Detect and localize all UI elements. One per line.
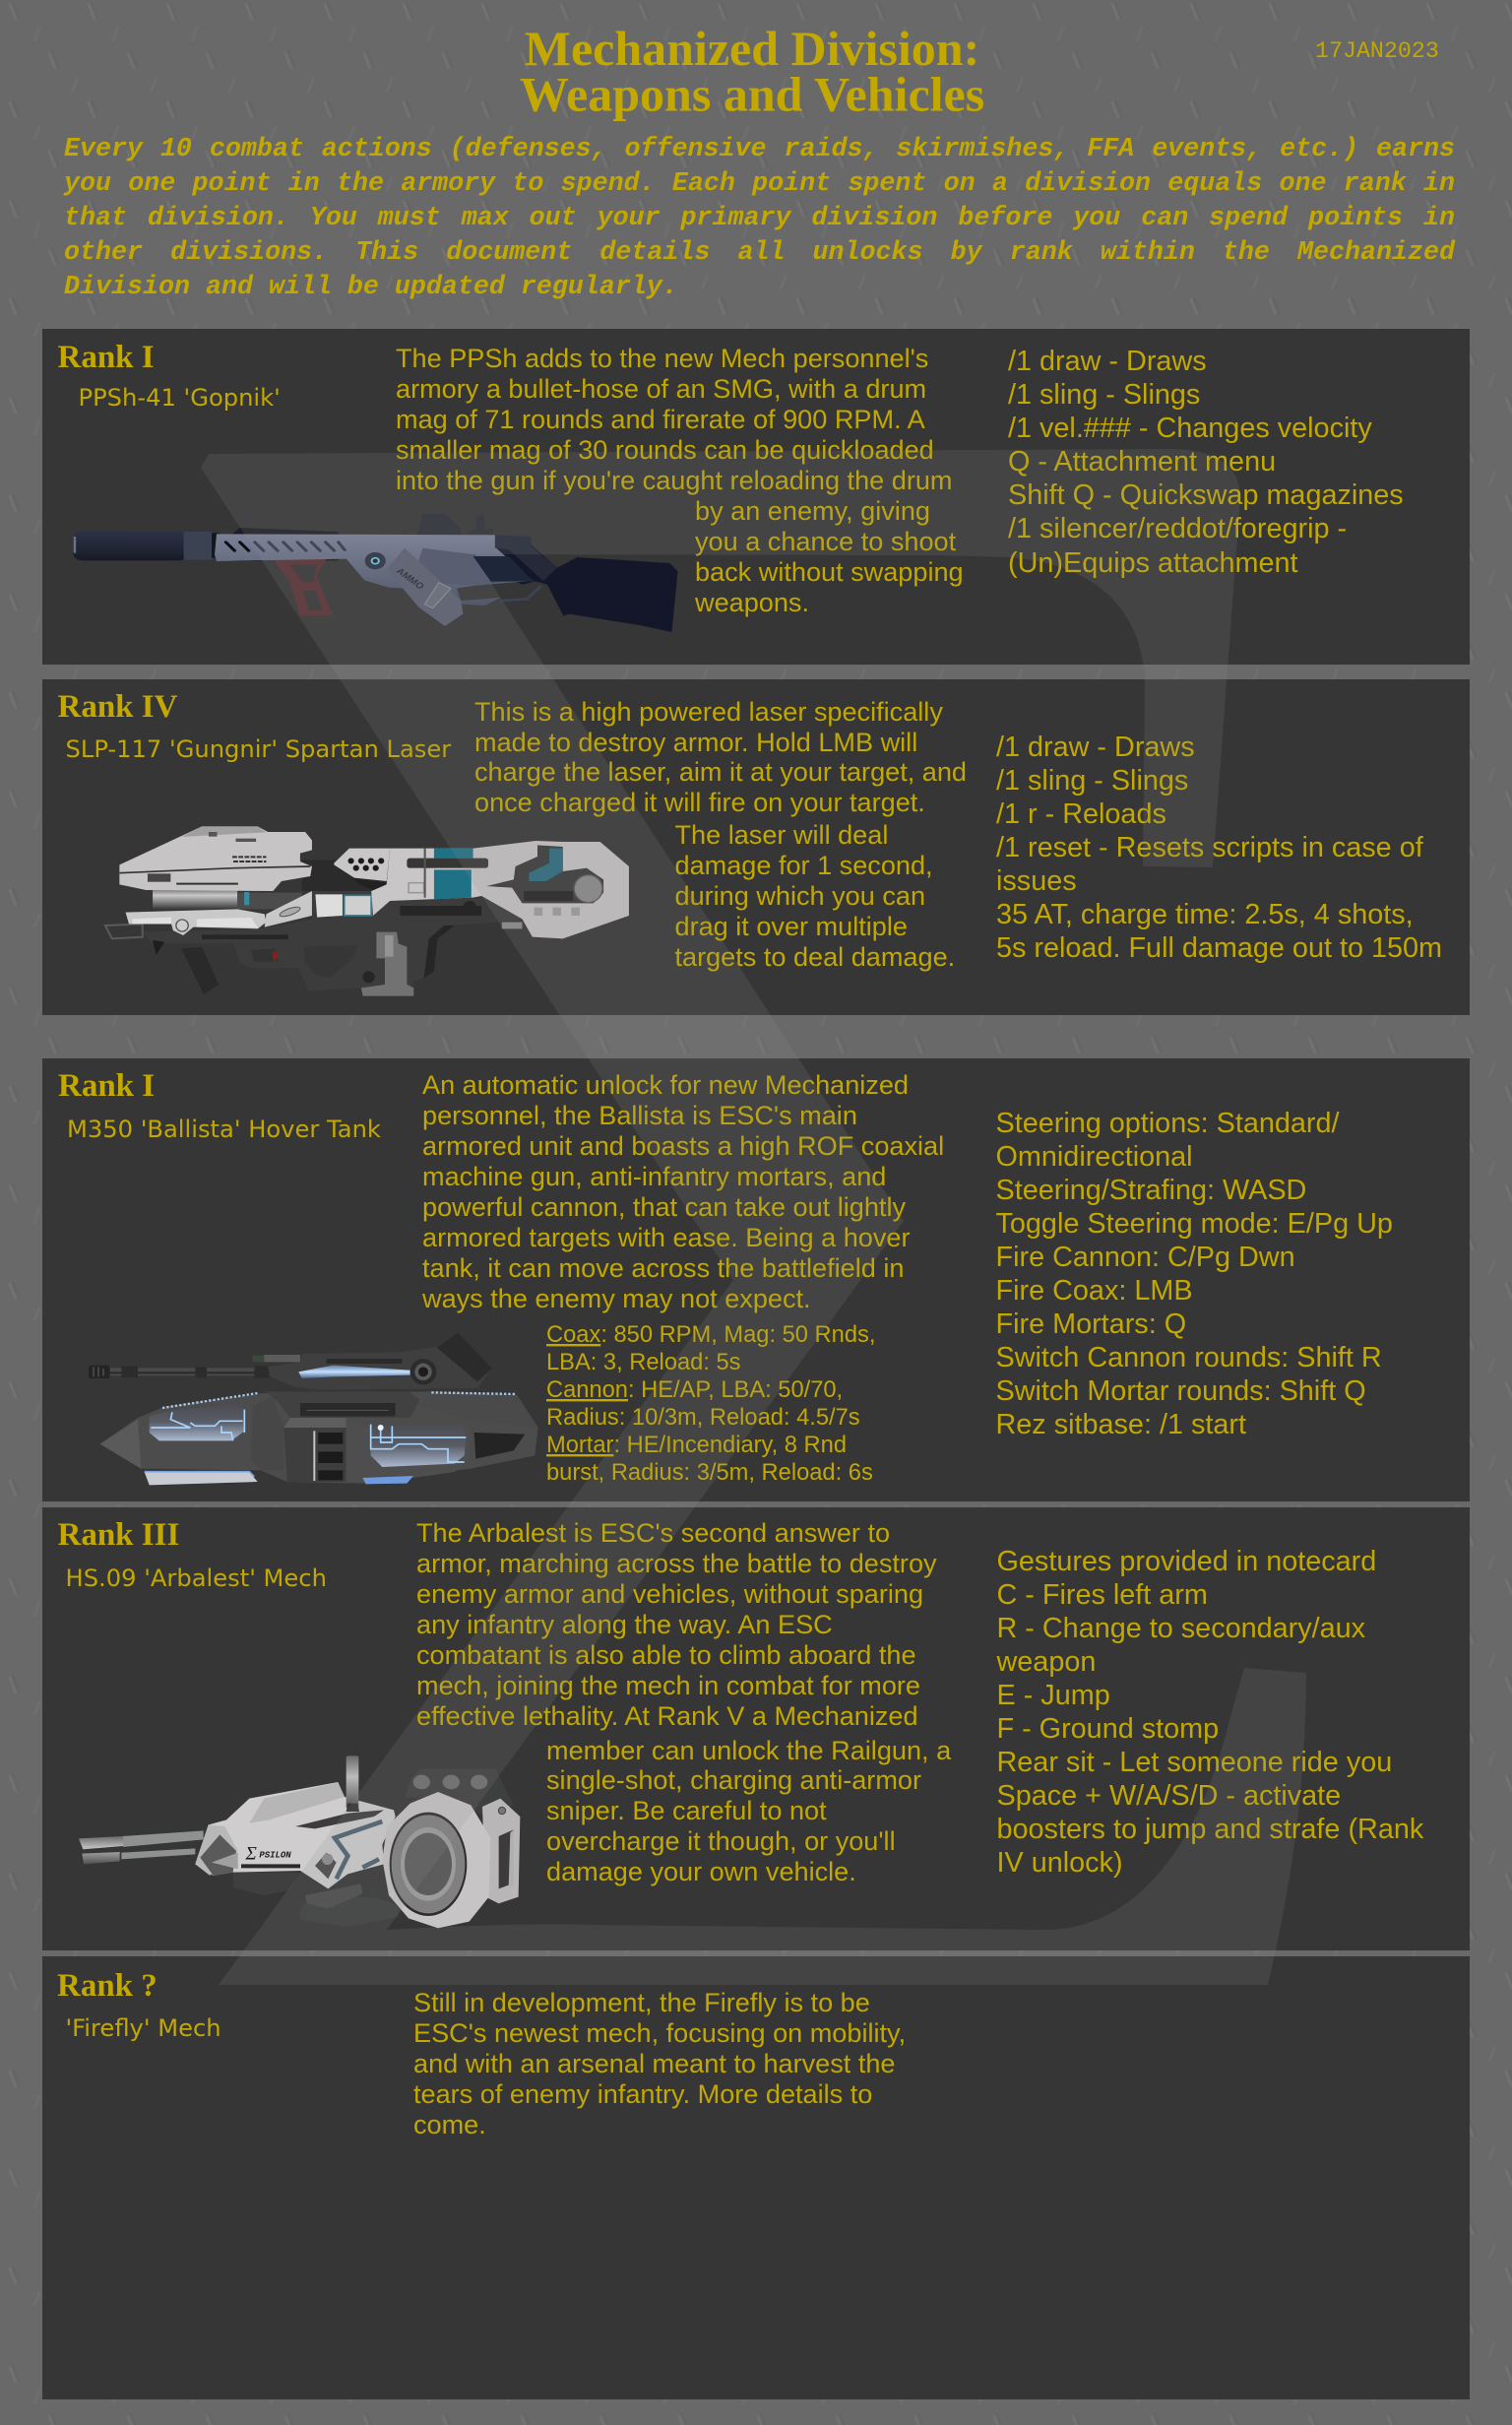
- card 3 description: ways the enemy may not expect.: [421, 1283, 811, 1313]
- card 5 description: Still in development, the Firefly is to be: [413, 1987, 870, 2017]
- card 4 description: member can unlock the Railgun, a: [546, 1735, 952, 1765]
- card 1 description: into the gun if you're caught reloading the drum: [396, 465, 952, 495]
- panel: Firefly: [42, 1956, 1470, 2399]
- card 2 controls: /1 reset - Resets scripts in case of: [996, 832, 1424, 863]
- card 5 description: and with an arsenal meant to harvest the: [413, 2048, 896, 2078]
- card 3 description: machine gun, anti-infantry mortars, and: [422, 1161, 886, 1191]
- panel: PPSh-41: [42, 329, 1470, 665]
- card 5 description: ESC's newest mech, focusing on mobility,: [413, 2017, 906, 2048]
- card 5 heading: Rank ?: Rank ?: [57, 1968, 158, 2004]
- card 2 description: The laser will deal: [675, 819, 888, 850]
- card 4 description: any infantry along the way. An ESC: [416, 1609, 833, 1639]
- card 4 controls: Gestures provided in notecard: [996, 1546, 1376, 1577]
- card 4 heading: Rank III: Rank III: [57, 1517, 179, 1553]
- card 1 controls: (Un)Equips attachment: [1008, 547, 1298, 579]
- card 3 controls: Fire Cannon: C/Pg Dwn: [996, 1242, 1295, 1273]
- card 3 item name: M350 'Ballista' Hover Tank: [67, 1116, 381, 1143]
- panel: M350 Ballista: [42, 1058, 1470, 1501]
- card 4 controls: E - Jump: [996, 1680, 1110, 1711]
- card 3 controls: Fire Mortars: Q: [996, 1308, 1186, 1340]
- card 2 controls: 35 AT, charge time: 2.5s, 4 shots,: [996, 899, 1414, 930]
- card 4 controls: F - Ground stomp: [996, 1713, 1219, 1745]
- card 4 description: combatant is also able to climb aboard the: [416, 1639, 916, 1670]
- card 3 weapon stats: burst, Radius: 3/5m, Reload: 6s: [546, 1460, 873, 1486]
- card 3 heading: Rank I: Rank I: [58, 1068, 155, 1104]
- card 4 controls: boosters to jump and strafe (Rank: [996, 1814, 1424, 1845]
- card 4 controls: Rear sit - Let someone ride you: [996, 1747, 1392, 1778]
- card 4 controls: C - Fires left arm: [996, 1579, 1208, 1611]
- card 2 item name: SLP-117 'Gungnir' Spartan Laser: [65, 735, 451, 763]
- card 1 description: The PPSh adds to the new Mech personnel's: [396, 343, 928, 373]
- card 3 controls: Fire Coax: LMB: [996, 1275, 1193, 1307]
- card 4 description: enemy armor and vehicles, without sparing: [416, 1578, 923, 1609]
- card 3 controls: Switch Mortar rounds: Shift Q: [996, 1375, 1366, 1407]
- card 1 controls: /1 draw - Draws: [1008, 346, 1207, 377]
- card 3 weapon stats: : HE/AP, LBA: 50/70,: [628, 1377, 843, 1403]
- card 4 description: damage your own vehicle.: [546, 1856, 856, 1886]
- card 2 description: damage for 1 second,: [675, 850, 933, 880]
- card 1 controls: /1 sling - Slings: [1008, 379, 1200, 411]
- watermark: large translucent division logo: [201, 449, 1306, 1985]
- image: Arbalest mech: [79, 1755, 520, 1928]
- card 2 controls: /1 sling - Slings: [996, 765, 1188, 797]
- card 4 controls: weapon: [996, 1646, 1096, 1678]
- card 1 controls: Q - Attachment menu: [1008, 446, 1276, 478]
- card 2 controls: /1 draw - Draws: [996, 732, 1195, 763]
- card 5 item name: 'Firefly' Mech: [65, 2014, 221, 2042]
- card 2 heading: Rank IV: Rank IV: [57, 689, 178, 725]
- card 3 description: An automatic unlock for new Mechanized: [422, 1069, 909, 1100]
- image: Arbalest mech: PSILON: [259, 1851, 291, 1861]
- card 2 controls: /1 r - Reloads: [996, 798, 1166, 830]
- card 1 description: smaller mag of 30 rounds can be quickloaded: [396, 434, 934, 465]
- card 4 controls: Space + W/A/S/D - activate: [996, 1780, 1341, 1812]
- card 3 description: powerful cannon, that can take out lightly: [422, 1191, 906, 1222]
- card 2 description: during which you can: [675, 880, 925, 911]
- card 2 description: drag it over multiple: [675, 911, 908, 941]
- card 1 description: armory a bullet-hose of an SMG, with a drum: [396, 373, 926, 404]
- card 4 description: mech, joining the mech in combat for more: [416, 1670, 920, 1700]
- card 4 description: sniper. Be careful to not: [546, 1795, 827, 1825]
- card 5 description: tears of enemy infantry. More details to: [413, 2078, 872, 2109]
- card 1 controls: /1 silencer/reddot/foregrip -: [1008, 513, 1347, 544]
- card 3 controls: Omnidirectional: [996, 1141, 1193, 1173]
- card 3 weapon stats: Radius: 10/3m, Reload: 4.5/7s: [546, 1405, 860, 1431]
- title: Weapons and Vehicles: [520, 67, 984, 122]
- card 3 weapon stats: Cannon: [546, 1377, 628, 1403]
- card 3 description: personnel, the Ballista is ESC's main: [422, 1100, 857, 1130]
- card 1 controls: Shift Q - Quickswap magazines: [1008, 479, 1404, 511]
- card 4 item name: HS.09 'Arbalest' Mech: [65, 1564, 327, 1592]
- card 2 controls: 5s reload. Full damage out to 150m: [996, 932, 1442, 964]
- card 4 description: effective lethality. At Rank V a Mechanized: [416, 1700, 918, 1731]
- card 4 description: The Arbalest is ESC's second answer to: [416, 1517, 890, 1548]
- card 5 description: come.: [413, 2109, 486, 2139]
- card 4 controls: IV unlock): [996, 1847, 1123, 1879]
- image: PPSh-41 submachine gun: AMMO: [394, 566, 426, 592]
- card 3 weapon stats: Coax: [546, 1322, 600, 1348]
- card 1 item name: PPSh-41 'Gopnik': [79, 384, 281, 412]
- card 3 description: armored unit and boasts a high ROF coaxial: [422, 1130, 944, 1161]
- panel: SLP-117: [42, 679, 1470, 1015]
- card 4 description: armor, marching across the battle to destroy: [416, 1548, 937, 1578]
- card 2 description: targets to deal damage.: [675, 941, 955, 972]
- image: PPSh-41 submachine gun: [73, 512, 678, 632]
- card 1 heading: Rank I: Rank I: [57, 340, 155, 375]
- card 3 controls: Switch Cannon rounds: Shift R: [996, 1342, 1382, 1373]
- card 4 description: overcharge it though, or you'll: [546, 1825, 896, 1856]
- title: Mechanized Division:: [525, 21, 979, 76]
- card 3 controls: Steering options: Standard/: [996, 1108, 1339, 1139]
- card 3 description: armored targets with ease. Being a hover: [422, 1222, 910, 1252]
- image: Ballista hover tank: [89, 1332, 538, 1485]
- card 1 description: by an enemy, giving: [695, 495, 930, 526]
- image: Spartan Laser: [105, 826, 629, 996]
- card 3 weapon stats: : 850 RPM, Mag: 50 Rnds,: [600, 1322, 875, 1348]
- date: 17JAN2023: [1315, 38, 1439, 64]
- card 2 description: charge the laser, aim it at your target, and: [474, 756, 967, 787]
- card 4 description: single-shot, charging anti-armor: [546, 1764, 921, 1795]
- card 3 weapon stats: : HE/Incendiary, 8 Rnd: [613, 1433, 847, 1458]
- card 2 description: This is a high powered laser specifically: [474, 696, 943, 727]
- card 3 weapon stats: Mortar: [546, 1433, 614, 1458]
- card 2 controls: issues: [996, 865, 1077, 897]
- intro paragraph: Every 10 combat actions (defenses, offensive raids, skirmishes, FFA events, etc.) earns you one point in the armory to spend. Each point spent on a division equals one rank in that division. You must max out your primary division before you can spend points in other divisions. This document details all unlocks by rank within the Mechanized Division and will be updated regularly.: [64, 135, 1455, 302]
- card 1 description: back without swapping: [695, 556, 964, 587]
- card 1 description: you a chance to shoot: [695, 526, 957, 556]
- card 3 controls: Toggle Steering mode: E/Pg Up: [996, 1208, 1393, 1240]
- card 2 description: made to destroy armor. Hold LMB will: [474, 727, 917, 757]
- card 3 controls: Steering/Strafing: WASD: [996, 1175, 1306, 1206]
- card 1 controls: /1 vel.### - Changes velocity: [1008, 413, 1372, 444]
- card 3 description: tank, it can move across the battlefield in: [422, 1252, 904, 1283]
- card 2 description: once charged it will fire on your target.: [474, 787, 925, 817]
- panel: HS.09 Arbalest: [42, 1507, 1470, 1950]
- image: Arbalest mech: Σ: [244, 1843, 257, 1864]
- card 1 description: weapons.: [694, 587, 809, 617]
- card 4 controls: R - Change to secondary/aux: [996, 1613, 1366, 1644]
- card 3 weapon stats: LBA: 3, Reload: 5s: [546, 1350, 741, 1375]
- card 3 controls: Rez sitbase: /1 start: [996, 1409, 1246, 1440]
- card 1 description: mag of 71 rounds and firerate of 900 RPM. A: [396, 404, 926, 434]
